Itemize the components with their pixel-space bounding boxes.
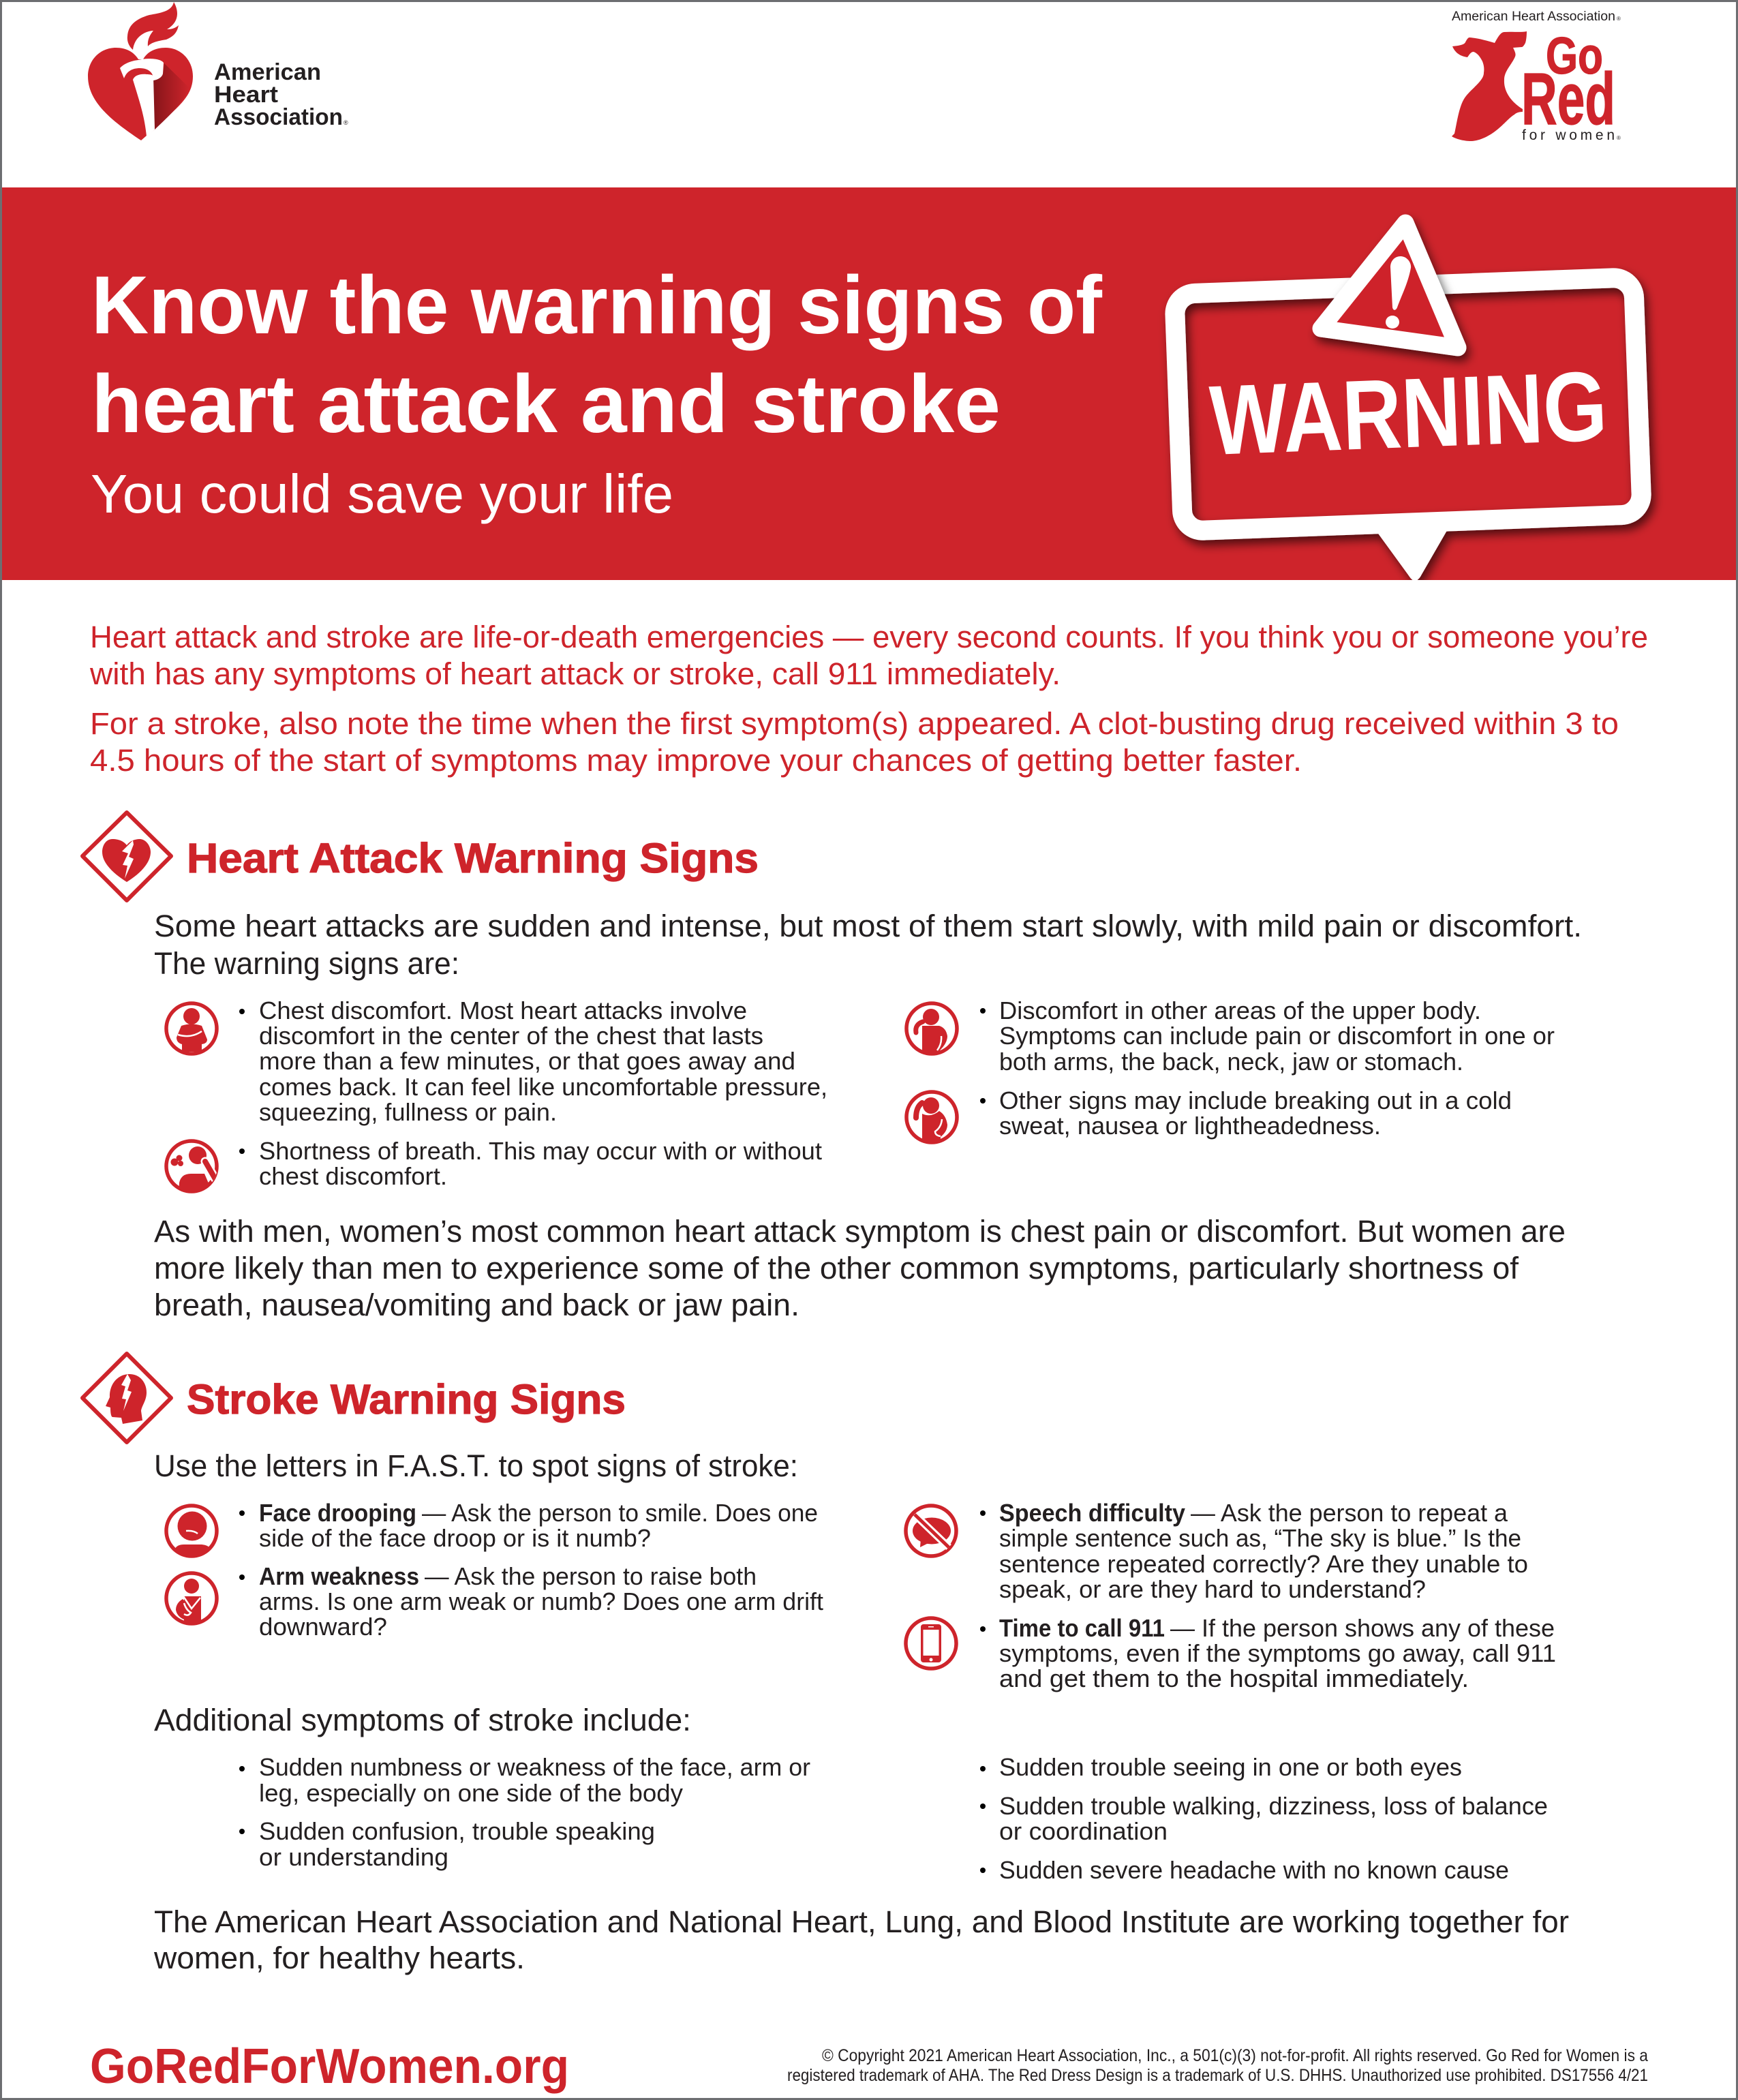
bullet: shortness of breath: chest discomfort. (259, 1162, 447, 1190)
banner title: Know the warning signs of (91, 258, 1103, 351)
copyright footer: registered trademark of AHA. The Red Dress Design is a trademark of U.S. DHHS. Unauthorized use prohibited. DS17556 4/21 (787, 2066, 1648, 2085)
additional symptoms: left list: Sudden confusion, trouble speaking (259, 1817, 655, 1845)
bullet: other signs: sweat, nausea or lightheadedness. (999, 1112, 1381, 1140)
heart attack intro: The warning signs are: (154, 946, 459, 981)
heart attack intro (154, 909, 1582, 981)
bullet: shortness of breath (239, 1137, 822, 1190)
intro paragraph: emergencies: with has any symptoms of heart attack or stroke, call 911 immediately. (89, 656, 1061, 691)
additional symptoms: right list: Sudden trouble walking, dizziness, loss of balance (999, 1792, 1548, 1820)
closing statement: The American Heart Association and National Heart, Lung, and Blood Institute are working together for (154, 1904, 1569, 1939)
logo: Go Red for Women: Red (1521, 57, 1615, 140)
bullet: face drooping: Face drooping (259, 1499, 416, 1527)
paragraph: women's symptoms: As with men, women’s most common heart attack symptom is chest pain or discomfort. But women are (154, 1214, 1566, 1249)
logo: American Heart Association: ® (344, 119, 348, 126)
additional symptoms: left list: leg, especially on one side of the body (259, 1779, 683, 1807)
intro paragraph: emergencies: Heart attack and stroke are life-or-death emergencies — every second counts. If you think you or someone you’re (90, 620, 1648, 654)
bullet: chest discomfort (239, 996, 827, 1126)
icon: chest discomfort (166, 1003, 217, 1054)
bullet: speech difficulty: — Ask the person to repeat a (1191, 1499, 1508, 1527)
bullet: other signs: Other signs may include breaking out in a cold (999, 1086, 1512, 1114)
additional symptoms heading: Additional symptoms of stroke include: (154, 1703, 691, 1737)
bullet: arm weakness: downward? (259, 1613, 387, 1641)
additional symptoms: left list (239, 1753, 810, 1871)
logo: Go Red for Women: ® (1617, 16, 1621, 22)
FAST intro: Use the letters in F.A.S.T. to spot signs of stroke: (154, 1448, 798, 1483)
logo: American Heart Association: Heart (214, 82, 278, 108)
copyright footer (787, 2046, 1648, 2085)
bullet: upper body discomfort: Discomfort in other areas of the upper body. (999, 996, 1481, 1024)
icon: stroke head diamond (82, 1354, 171, 1442)
bullet: speech difficulty: sentence repeated correctly? Are they unable to (999, 1550, 1528, 1578)
website: GoRedForWomen.org (90, 2039, 569, 2094)
intro paragraph: time of symptoms: 4.5 hours of the start of symptoms may improve your chances of getting better faster. (90, 743, 1302, 778)
bullet: time to call 911: Time to call 911 (999, 1614, 1165, 1642)
bullet: arm weakness: arms. Is one arm weak or numb? Does one arm drift (259, 1587, 823, 1615)
logo: Go Red for Women: for women (1522, 127, 1615, 143)
bullet: chest discomfort: comes back. It can feel like uncomfortable pressure, (259, 1073, 827, 1101)
bullet: speech difficulty: speak, or are they hard to understand? (999, 1575, 1426, 1603)
bullet: upper body discomfort (980, 996, 1555, 1076)
bullet: face drooping (239, 1499, 818, 1552)
heading: stroke warning signs: Stroke Warning Signs (187, 1376, 626, 1422)
icon: upper body discomfort (906, 1003, 957, 1054)
heading: heart attack warning signs: Heart Attack Warning Signs (187, 835, 759, 881)
bullet: time to call 911: symptoms, even if the symptoms go away, call 911 (999, 1639, 1556, 1667)
bullet: face drooping: — Ask the person to smile. Does one (422, 1499, 818, 1527)
additional symptoms: left list: Sudden numbness or weakness of the face, arm or (259, 1753, 810, 1781)
icon: broken heart diamond (82, 812, 171, 900)
intro paragraph: time of symptoms: For a stroke, also note the time when the first symptom(s) appeared. A clot-busting drug received within 3 to (90, 706, 1619, 741)
warning sign graphic (1174, 223, 1642, 581)
banner title (91, 258, 1103, 450)
bullet: speech difficulty: Speech difficulty (999, 1499, 1185, 1527)
logo: Go Red for Women: Go (1546, 27, 1603, 85)
paragraph: women's symptoms: more likely than men to experience some of the other common symptoms, particularly shortness of (154, 1251, 1519, 1285)
bullet: other signs (980, 1086, 1512, 1140)
icon: phone (906, 1618, 956, 1669)
icon: speech difficulty (906, 1506, 956, 1556)
icon: arm weakness (166, 1573, 217, 1624)
bullet: face drooping: side of the face droop or is it numb? (259, 1524, 651, 1552)
bullet: speech difficulty: simple sentence such as, “The sky is blue.” Is the (999, 1524, 1521, 1552)
additional symptoms: right list: or coordination (999, 1817, 1168, 1845)
additional symptoms: right list: Sudden trouble seeing in one or both eyes (999, 1753, 1462, 1781)
bullet: chest discomfort: squeezing, fullness or pain. (259, 1098, 557, 1126)
copyright footer: © Copyright 2021 American Heart Association, Inc., a 501(c)(3) not-for-profit. All rights reserved. Go Red for Women is a (822, 2046, 1648, 2065)
intro paragraph: time of symptoms (90, 706, 1619, 778)
red banner (0, 187, 1738, 581)
paragraph: women's symptoms (154, 1214, 1566, 1322)
banner title: heart attack and stroke (91, 357, 1001, 450)
logo: Go Red for Women (1452, 10, 1621, 143)
bullet: time to call 911: and get them to the hospital immediately. (999, 1664, 1469, 1692)
bullet: upper body discomfort: both arms, the back, neck, jaw or stomach. (999, 1048, 1463, 1076)
warning sign graphic: WARNING (1208, 350, 1609, 476)
bullet: time to call 911: — If the person shows any of these (1170, 1614, 1555, 1642)
bullet: chest discomfort: Chest discomfort. Most heart attacks involve (259, 996, 747, 1024)
bullet: arm weakness: — Ask the person to raise both (425, 1562, 757, 1590)
icon: face drooping (166, 1506, 217, 1557)
additional symptoms: right list (980, 1753, 1548, 1884)
bullet: chest discomfort: discomfort in the center of the chest that lasts (259, 1022, 763, 1050)
additional symptoms: right list: Sudden severe headache with no known cause (999, 1856, 1509, 1884)
additional symptoms: left list: or understanding (259, 1843, 448, 1871)
intro paragraph: emergencies (89, 620, 1648, 691)
bullet: chest discomfort: more than a few minutes, or that goes away and (259, 1047, 795, 1075)
bullet: upper body discomfort: Symptoms can include pain or discomfort in one or (999, 1022, 1555, 1050)
paragraph: women's symptoms: breath, nausea/vomiting and back or jaw pain. (154, 1288, 799, 1322)
icon: shortness of breath (166, 1141, 217, 1193)
logo: American Heart Association: Association (214, 104, 343, 130)
bullet: time to call 911 (980, 1614, 1556, 1692)
banner subtitle: You could save your life (91, 463, 673, 524)
logo: American Heart Association: American (214, 59, 321, 85)
logo: Go Red for Women: American Heart Association (1452, 10, 1615, 24)
closing statement: women, for healthy hearts. (153, 1941, 525, 1975)
heart attack intro: Some heart attacks are sudden and intense, but most of them start slowly, with mild pain or discomfort. (154, 909, 1582, 943)
logo: American Heart Association (88, 2, 348, 140)
closing statement (153, 1904, 1569, 1975)
logo: Go Red for Women: ® (1617, 135, 1621, 141)
icon: cold sweat and nausea (906, 1092, 957, 1142)
bullet: shortness of breath: Shortness of breath. This may occur with or without (259, 1137, 822, 1165)
bullet: arm weakness: Arm weakness (259, 1562, 419, 1590)
bullet: arm weakness (239, 1562, 823, 1641)
bullet: speech difficulty (980, 1499, 1528, 1603)
